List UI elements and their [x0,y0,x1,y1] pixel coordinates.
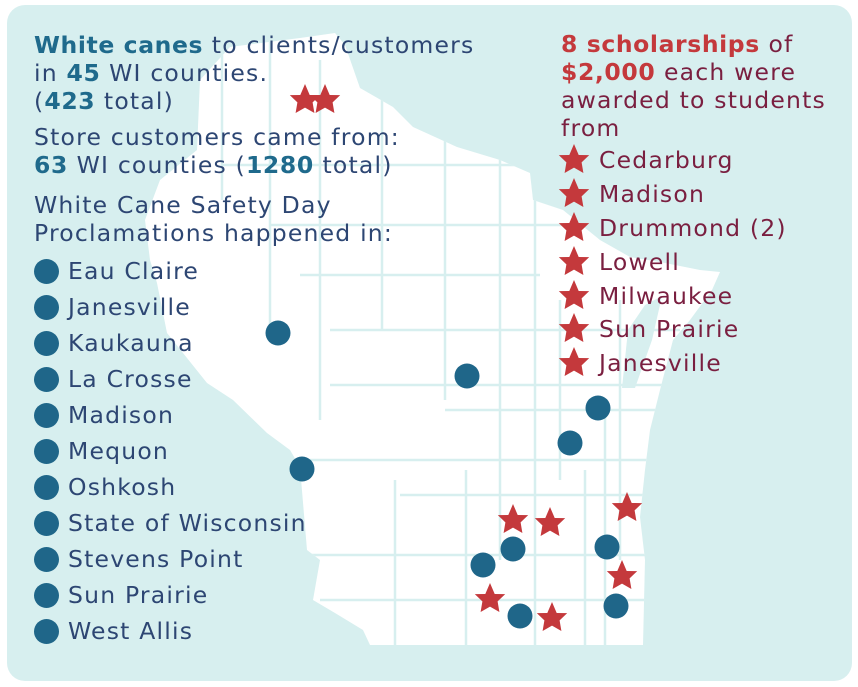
list: scholarship towns [598,146,787,377]
text block: scholarships [561,30,826,142]
text block: proclamations heading: Proclamations happened in: [34,219,393,247]
scholarship stars [290,84,642,631]
list: scholarship towns: Milwaukee [599,282,733,310]
list: proclamation cities: Madison [68,401,174,429]
list: proclamation cities: Eau Claire [68,257,199,285]
list: proclamation cities: State of Wisconsin [68,509,307,537]
list: proclamation cities: Stevens Point [68,545,244,573]
list: proclamation cities: La Crosse [68,365,193,393]
text block: store customers [34,123,400,179]
text block: white canes: White canes to clients/customers [34,31,474,59]
list: proclamation cities: Janesville [68,293,191,321]
icons: list stars [559,144,589,376]
text block: scholarships: $2,000 each were [561,58,796,86]
text block: white canes [34,31,474,115]
text block: white canes: (423 total) [34,87,174,115]
proclamation dots [266,320,628,628]
text block: store customers: 63 WI counties (1280 total) [34,151,393,179]
text block: proclamations heading: White Cane Safety Day [34,191,332,219]
list: proclamation cities: Oshkosh [68,473,176,501]
list: scholarship towns: Drummond (2) [599,214,787,242]
text block: proclamations heading [34,191,393,247]
list: proclamation cities: Kaukauna [68,329,194,357]
list: scholarship towns: Madison [599,180,705,208]
text block: scholarships: from [561,114,620,142]
list: proclamation cities [34,257,307,645]
text block: white canes: in 45 WI counties. [34,59,268,87]
list: scholarship towns: Sun Prairie [599,315,739,343]
list: proclamation cities: Mequon [68,437,169,465]
wisconsin map [145,33,720,645]
text block: scholarships: awarded to students [561,86,826,114]
list: proclamation cities: Sun Prairie [68,581,208,609]
list: proclamation cities: West Allis [68,617,193,645]
list: scholarship towns: Janesville [599,349,722,377]
text block: scholarships: 8 scholarships of [561,30,794,58]
text block: store customers: Store customers came from: [34,123,400,151]
list: scholarship towns: Cedarburg [599,146,734,174]
list: scholarship towns: Lowell [599,248,680,276]
